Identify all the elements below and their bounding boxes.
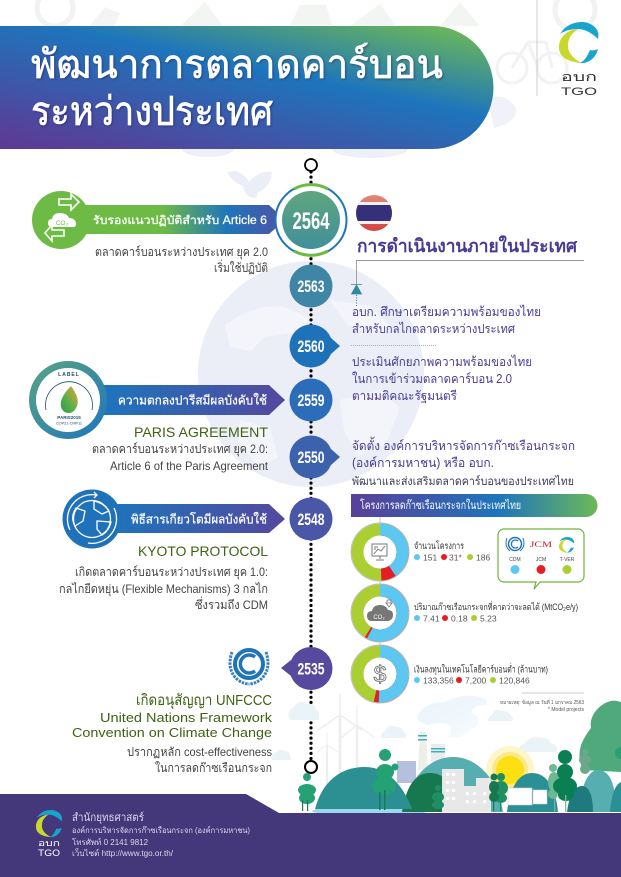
title banner bbox=[0, 26, 493, 149]
text block: domestic milestones: (องค์การมหาชน) หรือ อบก. bbox=[352, 456, 494, 470]
icon: CO2 cloud with arrows bbox=[45, 194, 79, 241]
text block: domestic milestones: อบก. ศึกษาเตรียมความพร้อมของไทย bbox=[352, 305, 541, 319]
text block: domestic milestones: พัฒนาและส่งเสริมตลาดคาร์บอนของประเทศไทย bbox=[352, 474, 574, 488]
year node 2550 bbox=[290, 436, 340, 478]
donut: low-carbon investment: เงินลงทุนในเทคโนโลยีคาร์บอนต่ำ (ล้านบาท) bbox=[414, 662, 548, 676]
icon: Paris COP21 label bbox=[29, 361, 107, 439]
year node 2550: 2550 bbox=[298, 448, 324, 467]
donut: expected emission reduction: 5.23 bbox=[480, 614, 497, 624]
donut: expected emission reduction bbox=[351, 584, 578, 642]
icon: Paris COP21 label: COP21·CMP11 bbox=[56, 422, 82, 426]
donut: expected emission reduction: 0.18 bbox=[451, 614, 468, 624]
callout: programme legend bbox=[498, 529, 584, 589]
icon: T-VER mark bbox=[559, 537, 574, 553]
event: UNFCCC bbox=[72, 650, 273, 775]
event: Paris Agreement: ตลาดคาร์บอนระหว่างประเทศ ยุค 2.0: bbox=[92, 442, 268, 457]
year node 2563: 2563 bbox=[298, 277, 324, 296]
icon: CO2 cloud: CO₂ bbox=[373, 615, 385, 621]
smoke and clouds bbox=[272, 696, 557, 760]
icon: Paris COP21 label: PARIS2015 bbox=[57, 415, 81, 420]
callout: programme legend: JCM bbox=[530, 540, 552, 549]
donut: expected emission reduction: 7.41 bbox=[423, 614, 440, 624]
event: Paris Agreement bbox=[29, 361, 285, 473]
event: Kyoto Protocol: ซึ่งรวมถึง CDM bbox=[195, 596, 268, 612]
background watermark pattern bbox=[37, 0, 595, 487]
event: Paris Agreement: ความตกลงปารีสมีผลบังคับใช้ bbox=[118, 394, 267, 408]
event: UNFCCC: United Nations Framework bbox=[100, 710, 273, 725]
event: Kyoto Protocol: KYOTO PROTOCOL bbox=[138, 543, 268, 559]
timeline spine bbox=[305, 159, 317, 773]
icon: CDM bbox=[506, 538, 524, 551]
event: Kyoto Protocol bbox=[59, 490, 285, 612]
text block: domestic milestones: ตามมติคณะรัฐมนตรี bbox=[352, 389, 457, 403]
footer contact text: โทรศัพท์ 0 2141 9812 bbox=[72, 837, 149, 847]
heading: domestic operations: การดำเนินงานภายในประเทศ bbox=[357, 235, 578, 256]
text block: domestic milestones: ประเมินศักยภาพความพร้อมของไทย bbox=[352, 355, 532, 369]
TGO logo header: TGO bbox=[561, 86, 598, 98]
title heading: พัฒนาการตลาดคาร์บอน bbox=[31, 42, 443, 87]
event: Kyoto Protocol: พิธีสารเกียวโตมีผลบังคับใช้ bbox=[131, 512, 267, 526]
event: Paris Agreement: Article 6 of the Paris Agreement bbox=[110, 459, 269, 473]
city buildings bbox=[442, 769, 491, 812]
donut: number of projects bbox=[351, 523, 490, 581]
title heading: ระหว่างประเทศ bbox=[31, 90, 273, 134]
solar panels bbox=[508, 788, 547, 805]
event: UNFCCC: ปรากฏหลัก cost-effectiveness bbox=[127, 745, 272, 759]
year node 2563 bbox=[290, 264, 332, 308]
sub-heading bar: โครงการลดก๊าซเรือนกระจกในประเทศไทย bbox=[360, 498, 521, 512]
donut: low-carbon investment bbox=[351, 645, 548, 703]
callout: programme legend: JCM bbox=[536, 557, 546, 563]
year node 2564 bbox=[276, 184, 346, 256]
icon: UNFCCC emblem bbox=[230, 650, 268, 684]
icon: CO2 cloud bbox=[367, 600, 393, 621]
event: UNFCCC: ในการลดก๊าซเรือนกระจก bbox=[155, 761, 272, 775]
text block: domestic milestones: จัดตั้ง องค์การบริหารจัดการก๊าซเรือนกระจก bbox=[352, 436, 575, 453]
event: Kyoto Protocol: เกิดตลาดคาร์บอนระหว่างประเทศ ยุค 1.0: bbox=[75, 565, 268, 580]
year node 2560 bbox=[290, 324, 340, 368]
event: Paris Agreement: PARIS AGREEMENT bbox=[134, 424, 268, 440]
data source note bbox=[500, 692, 584, 713]
donut: number of projects: จำนวนโครงการ bbox=[414, 540, 464, 552]
year node 2548 bbox=[290, 498, 332, 540]
icon: CO2 cloud with arrows: CO₂ bbox=[56, 220, 69, 227]
wind turbines bbox=[317, 693, 374, 785]
year node 2559: 2559 bbox=[298, 391, 324, 410]
flag: Thailand bbox=[356, 195, 392, 231]
donut: expected emission reduction: ปริมาณก๊าซเรือนกระจกที่คาดว่าจะลดได้ (MtCO₂e/y) bbox=[414, 600, 578, 612]
event: UNFCCC: เกิดอนุสัญญา UNFCCC bbox=[136, 692, 272, 710]
landscape illustration bbox=[272, 693, 621, 816]
event: Article 6 banner: รับรองแนวปฏิบัติสำหรับ Article 6 bbox=[93, 214, 267, 227]
footer logo: TGO bbox=[38, 848, 60, 858]
TGO logo header: อบก bbox=[561, 70, 597, 84]
year node 2560: 2560 bbox=[298, 337, 324, 356]
donut: low-carbon investment: 133,356 bbox=[423, 676, 454, 686]
sun bbox=[486, 746, 534, 794]
icon: globe with orbit bbox=[67, 492, 117, 543]
footer contact text bbox=[72, 811, 250, 858]
footer bbox=[0, 794, 621, 877]
icon: presentation chart bbox=[372, 544, 387, 560]
text block: domestic milestones bbox=[351, 305, 575, 488]
footer contact text: เว็บไซต์ http://www.tgo.or.th/ bbox=[72, 848, 174, 858]
TGO logo header bbox=[537, 0, 599, 98]
trees bbox=[298, 748, 591, 812]
factory bbox=[397, 732, 445, 783]
title heading bbox=[31, 42, 443, 134]
year node 2564: 2564 bbox=[292, 208, 330, 235]
event: Article 6 banner: เริ่มใช้ปฏิบัติ bbox=[214, 259, 268, 275]
donut: low-carbon investment: 120,846 bbox=[499, 676, 530, 686]
event: UNFCCC: Convention on Climate Change bbox=[72, 725, 272, 740]
event: Article 6 banner bbox=[32, 191, 285, 275]
donut: low-carbon investment: 7,200 bbox=[465, 676, 487, 686]
data source note: * Model projects bbox=[548, 707, 584, 713]
text block: domestic milestones: สำหรับกลไกตลาดระหว่างประเทศ bbox=[352, 322, 515, 336]
year node 2559 bbox=[290, 378, 332, 422]
year node 2535: 2535 bbox=[298, 660, 324, 678]
data source note: หมายเหตุ: ข้อมูล ณ วันที่ 1 มกราคม 2563 bbox=[500, 699, 584, 706]
callout: programme legend: T-VER bbox=[560, 557, 575, 563]
text block: domestic milestones: ในการเข้าร่วมตลาดคาร์บอน 2.0 bbox=[352, 372, 512, 386]
year node 2548: 2548 bbox=[298, 510, 324, 529]
sub-heading bar bbox=[351, 494, 598, 517]
donut: number of projects: 31* bbox=[449, 552, 462, 562]
event: Article 6 banner: ตลาดคาร์บอนระหว่างประเทศ ยุค 2.0 bbox=[95, 245, 268, 260]
hills bbox=[312, 701, 621, 816]
footer contact text: องค์การบริหารจัดการก๊าซเรือนกระจก (องค์การมหาชน) bbox=[72, 825, 250, 835]
footer logo: อบก bbox=[38, 838, 60, 848]
year node 2535 bbox=[281, 647, 332, 690]
icon: Paris COP21 label: LABEL bbox=[58, 372, 80, 378]
event: Kyoto Protocol: กลไกยืดหยุ่น (Flexible Mechanisms) 3 กลไก bbox=[59, 582, 268, 597]
donut: number of projects: 186 bbox=[476, 552, 490, 562]
icon: dollar sign: $ bbox=[374, 661, 387, 687]
footer contact text: สำนักยุทธศาสตร์ bbox=[72, 811, 144, 824]
panel: emission reduction projects bbox=[351, 494, 598, 713]
donut: number of projects: 151 bbox=[423, 552, 437, 562]
heading: domestic operations bbox=[351, 235, 584, 306]
footer logo bbox=[36, 810, 62, 858]
callout: programme legend: CDM bbox=[509, 557, 521, 563]
